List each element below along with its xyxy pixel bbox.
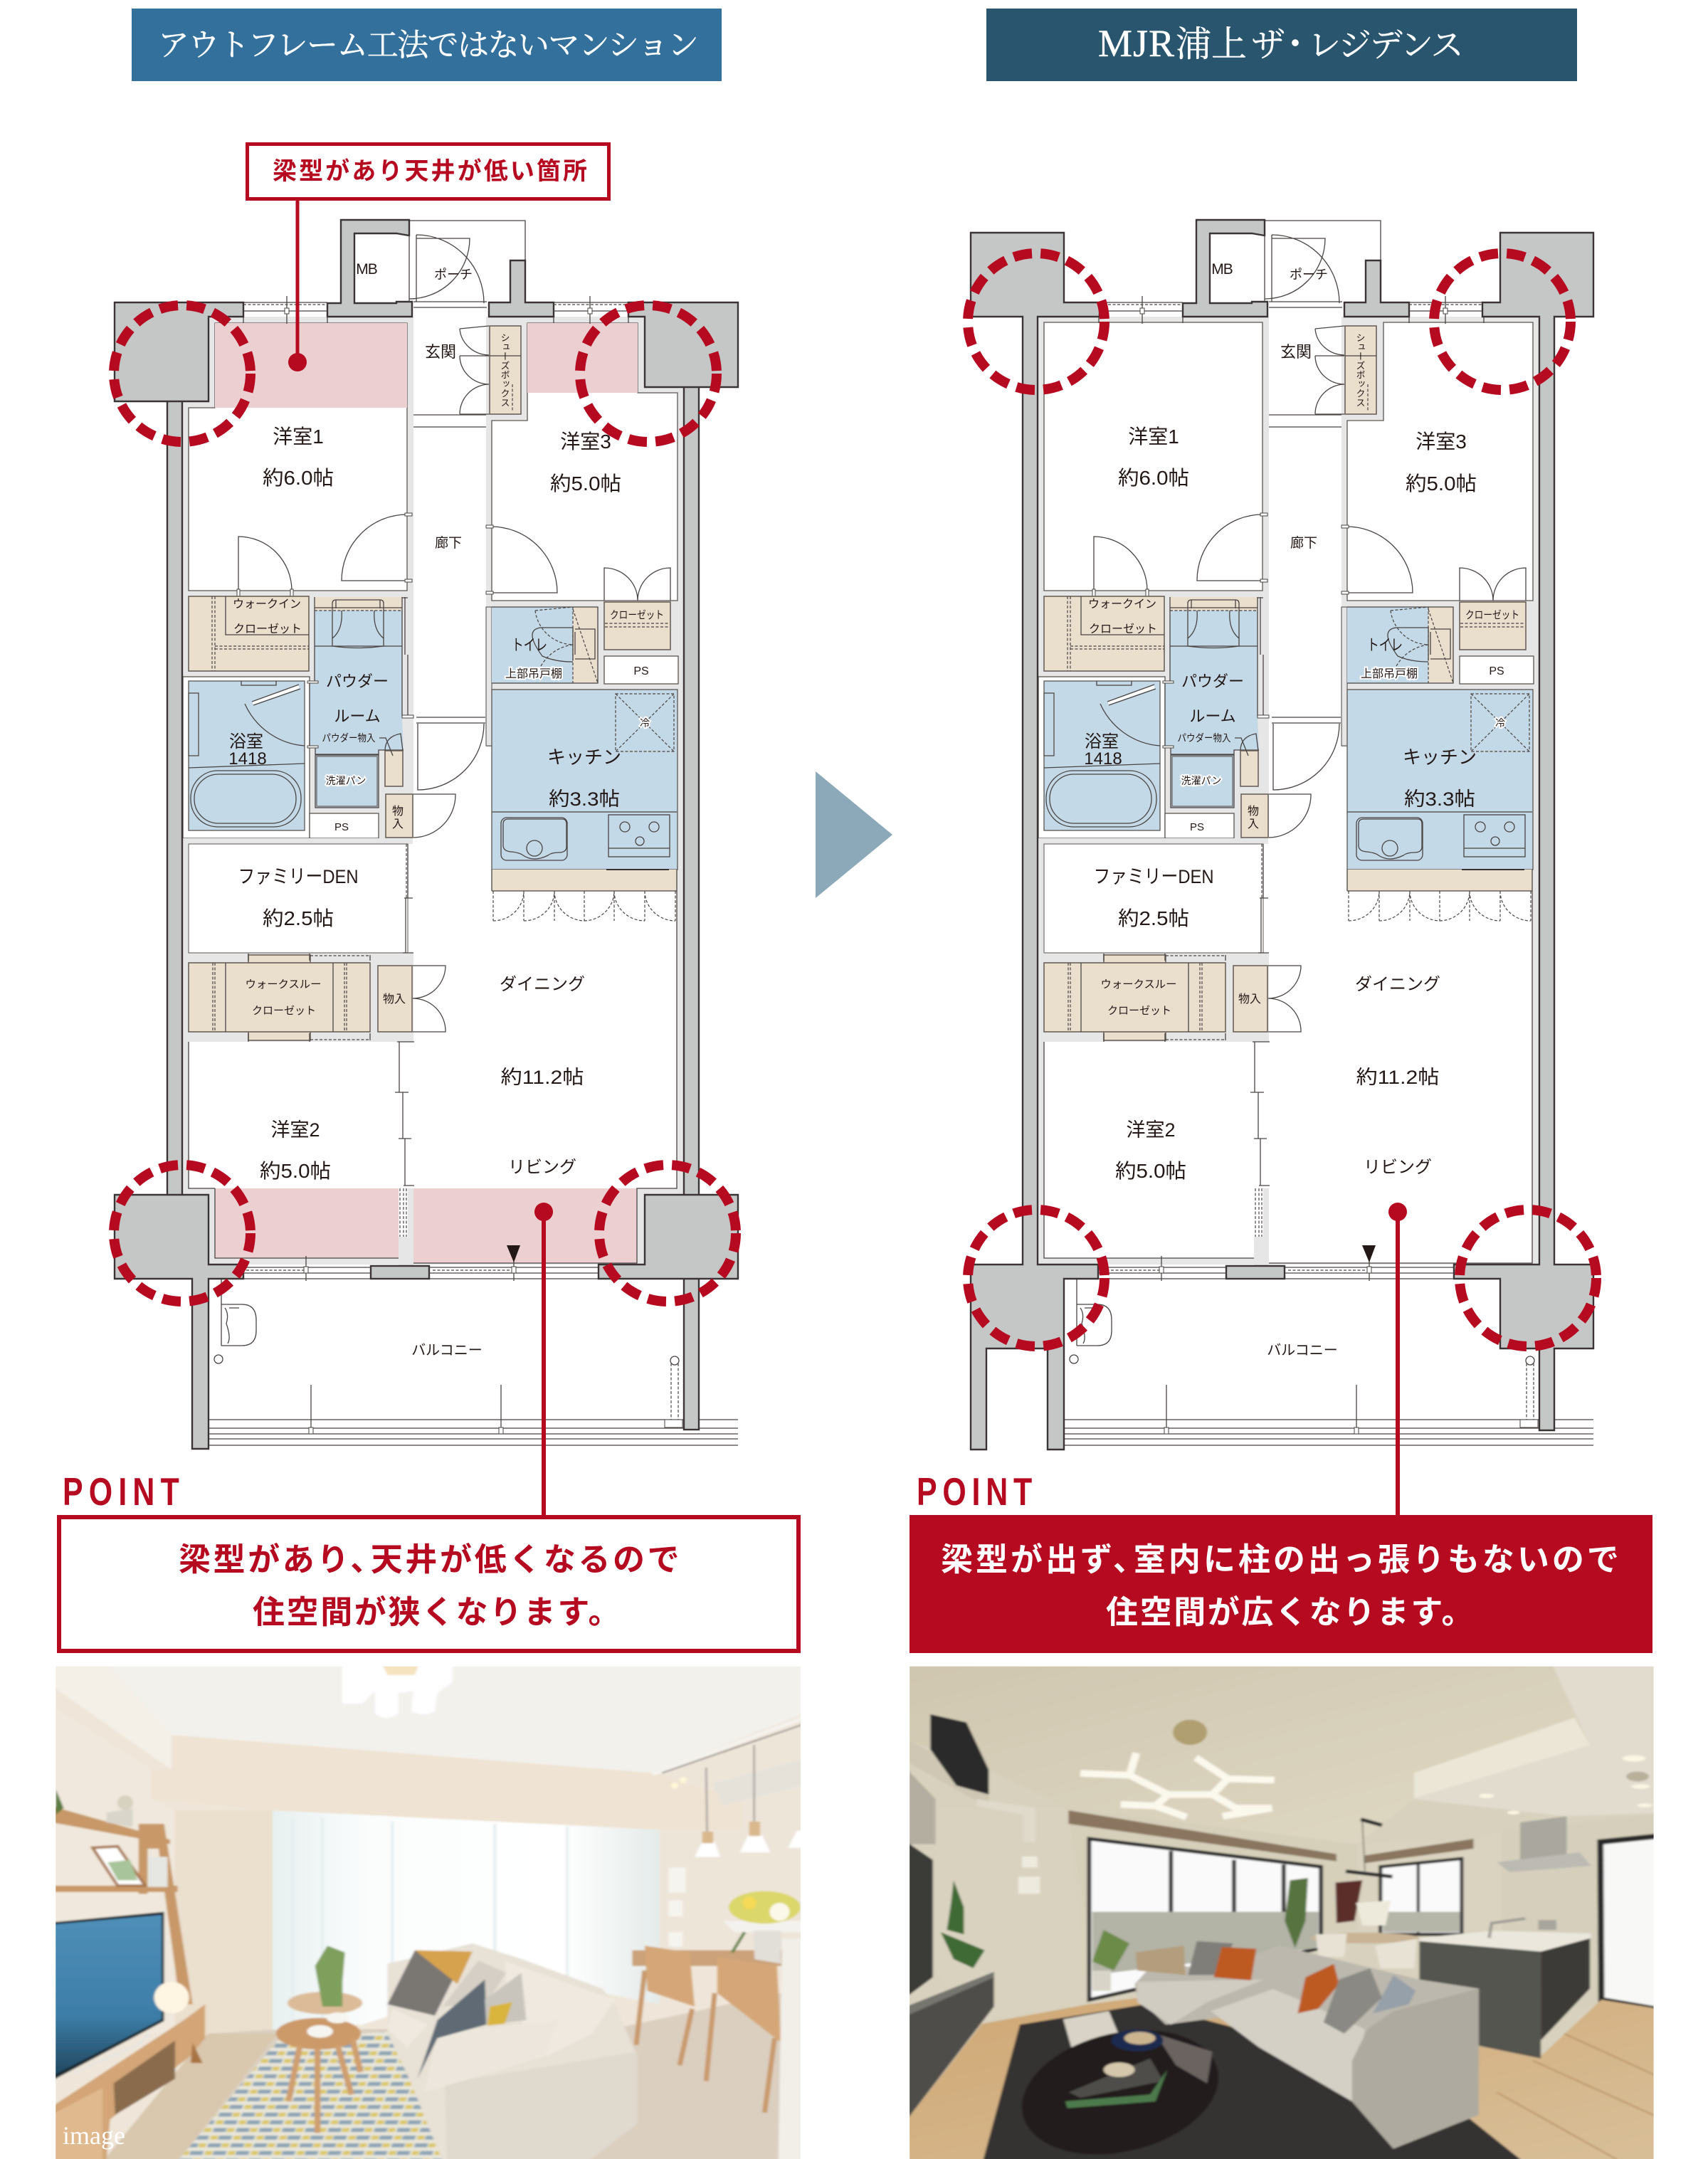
room labels: 物入 (1238, 993, 1261, 1005)
window blinds (1068, 1810, 1337, 1862)
room labels: ポーチ (434, 268, 473, 282)
dashed ring: bottom-right column (599, 1165, 736, 1302)
room labels: 洋室1 (1128, 426, 1179, 448)
room labels: リビング (1364, 1158, 1432, 1177)
room labels: パウダー (326, 672, 389, 690)
room labels: パウダー (1181, 672, 1244, 690)
callout box right: 住空間が広くなります。 (1106, 1594, 1475, 1630)
callout box left (59, 1517, 798, 1651)
room labels: 物入 (383, 993, 406, 1005)
dashed ring: top-right column (580, 305, 717, 442)
header: アウトフレーム工法ではないマンション (132, 9, 722, 81)
ceiling (110, 1667, 801, 1773)
callout box right (910, 1515, 1652, 1653)
room labels: キッチン (547, 746, 621, 768)
room labels: MB (1211, 261, 1233, 278)
plant (315, 1946, 345, 2007)
AC and duct (930, 1714, 989, 1795)
room labels: クローゼット (1107, 1005, 1171, 1017)
range hood (1520, 1816, 1566, 1860)
room labels: クローゼット (233, 623, 302, 635)
flowers (729, 1891, 801, 1923)
room labels: 冷 (1495, 717, 1505, 729)
room labels: ポーチ (1290, 268, 1328, 282)
floor (897, 1997, 1672, 2159)
room labels: PS (1190, 821, 1204, 833)
room labels: 約11.2帖 (1356, 1067, 1439, 1088)
room labels: 入 (392, 818, 404, 830)
glass door right (1601, 1835, 1667, 2011)
room labels: 約3.3帖 (1404, 788, 1475, 810)
room labels: パウダー物入 (1177, 732, 1231, 744)
leader line to top pink zone (288, 200, 307, 371)
room labels: 上部吊戸棚 (505, 667, 562, 680)
room labels: 約5.0帖 (260, 1160, 331, 1182)
plants (1285, 1878, 1308, 1948)
dashed ring: bottom-left column (114, 1165, 251, 1302)
room labels: 洗濯パン (1181, 775, 1221, 786)
room labels: 玄関 (425, 343, 456, 361)
pendants and track (652, 1717, 801, 1776)
room labels: 浴室 (1085, 732, 1119, 751)
fixtures, doors and walls (1038, 220, 1593, 1445)
room labels: 約2.5帖 (1118, 907, 1189, 929)
header: MJR浦上ザ・レジデンス: 浦上 (1176, 24, 1247, 64)
header: MJR浦上ザ・レジデンス: ・ (1277, 24, 1313, 64)
structural walls and outframe columns pushed outside (971, 233, 1593, 1450)
header: MJR浦上ザ・レジデンス: ザ (1251, 26, 1285, 64)
coffee table (1063, 2011, 1120, 2052)
room labels: シューズボックス (1355, 333, 1365, 407)
outlets (669, 1868, 685, 1892)
globe lamp (154, 1982, 189, 2013)
room labels: バルコニー (1267, 1343, 1338, 1358)
photo: left living room (43, 1654, 822, 2159)
room labels: ルーム (334, 707, 381, 725)
room labels: 約6.0帖 (1118, 467, 1189, 489)
callout: 梁型があり天井が低い箇所 (248, 144, 609, 199)
room labels: 洋室2 (1126, 1119, 1176, 1141)
room labels: 1418 (228, 749, 267, 769)
POINT heading left: POINT (63, 1470, 179, 1514)
interior slab (182, 317, 684, 1265)
ceiling (897, 1654, 1590, 1844)
sofa (387, 1943, 637, 2159)
panel: right floor plan (971, 220, 1593, 1450)
callout box left: 住空間が狭くなります。 (253, 1594, 622, 1630)
pendant (1346, 1820, 1392, 1876)
room labels: PS (633, 665, 649, 677)
main beam (152, 1735, 742, 1830)
rug (979, 2005, 1538, 2159)
dashed ring: right plan top-right column (1434, 253, 1571, 390)
header: アウトフレーム工法ではないマンション: アウトフレーム工法ではないマンション (158, 28, 699, 63)
room labels: クローゼット (252, 1005, 316, 1017)
room labels: シューズボックス (500, 333, 510, 407)
walls (936, 1808, 1088, 2020)
room labels: 浴室 (229, 732, 263, 751)
TV (56, 1911, 166, 2080)
chairs and table (1311, 1933, 1419, 1943)
dashed ring: top-left column (114, 305, 251, 442)
room labels: 約2.5帖 (263, 907, 334, 929)
POINT heading right: POINT (917, 1470, 1032, 1514)
header: MJR浦上ザ・レジデンス: MJR (1098, 22, 1175, 65)
room labels: ファミリーDEN (1093, 866, 1214, 887)
header: MJR浦上ザ・レジデンス (986, 9, 1577, 81)
cushions (1188, 1941, 1233, 1975)
room labels: 洋室1 (273, 426, 324, 448)
coffee tables (288, 1992, 362, 2015)
kitchen island (1419, 1941, 1541, 2059)
cushions (387, 1951, 463, 2015)
room labels: 廊下 (1290, 535, 1317, 551)
room labels: キッチン (1403, 746, 1477, 768)
room labels: ウォークイン (1088, 598, 1156, 611)
room labels: 約5.0帖 (1406, 473, 1477, 495)
room labels: MB (356, 261, 377, 278)
room labels: 洗濯パン (326, 775, 366, 786)
room labels: 入 (1248, 818, 1259, 830)
room labels: トイレ (1367, 636, 1403, 654)
floor (190, 1992, 781, 2159)
room labels: クローゼット (610, 609, 664, 621)
room labels: バルコニー (411, 1343, 483, 1358)
ladder shelf and shelves (139, 1824, 193, 2005)
room labels: 物 (392, 805, 404, 818)
fixtures, doors and walls (183, 220, 738, 1445)
windows (1089, 1839, 1321, 2000)
dashed ring: right plan top-left column (968, 253, 1105, 390)
panel: left floor plan (115, 220, 738, 1449)
room labels: PS (1489, 665, 1504, 677)
room labels: ダイニング (1355, 975, 1440, 994)
label: image: image (63, 2121, 125, 2150)
room labels: ルーム (1189, 707, 1236, 725)
room labels: 洋室2 (270, 1119, 320, 1141)
room labels: ウォークスルー (245, 978, 322, 991)
room labels: クローゼット (1089, 623, 1157, 635)
TV wall and console (897, 1835, 933, 2005)
right wall (652, 1716, 822, 1948)
curtain (273, 1810, 660, 2030)
room labels: 物 (1248, 805, 1259, 818)
leader line to bottom pink zone (534, 1203, 553, 1517)
rug (167, 2032, 453, 2159)
room labels: 約5.0帖 (550, 473, 621, 495)
room shapes without beams (1044, 307, 1533, 1263)
room labels: 約11.2帖 (501, 1067, 584, 1088)
arrow between plans (816, 771, 892, 898)
structural walls and outframe columns pushed inward (115, 302, 738, 1449)
leader line right plan (1388, 1203, 1407, 1517)
chandelier (1173, 1720, 1207, 1745)
room labels: 1418 (1084, 749, 1122, 769)
room labels: 約3.3帖 (549, 788, 620, 810)
room labels: 玄関 (1280, 343, 1312, 361)
callout box left: 梁型があり、天井が低くなるので (179, 1541, 682, 1578)
room labels: リビング (508, 1158, 576, 1177)
ceiling light (342, 1667, 453, 1718)
room labels: パウダー物入 (322, 732, 376, 744)
room labels: ウォークイン (233, 598, 301, 611)
dashed ring: right plan bottom-left column (968, 1210, 1105, 1346)
room labels: 上部吊戸棚 (1361, 667, 1418, 680)
downlights (1623, 1756, 1645, 1762)
room labels: 約5.0帖 (1115, 1160, 1186, 1182)
room labels: 洋室3 (1416, 431, 1467, 453)
room labels: 洋室3 (560, 431, 611, 453)
room labels: PS (334, 821, 349, 833)
side beam (56, 1667, 171, 1768)
room labels: 冷 (640, 717, 650, 729)
photo: right living room (897, 1654, 1672, 2159)
dashed ring: right plan bottom-right column (1460, 1210, 1596, 1346)
room labels: ウォークスルー (1100, 978, 1177, 991)
sofa (1134, 1946, 1479, 2149)
dining (632, 1951, 782, 1966)
interior slab (1038, 317, 1539, 1265)
callout box right: 梁型が出ず、室内に柱の出っ張りもないので (941, 1541, 1622, 1578)
TV stand (43, 2005, 205, 2159)
callout: 梁型があり天井が低い箇所: 梁型があり天井が低い箇所 (273, 157, 587, 185)
header: MJR浦上ザ・レジデンス: レジデンス (1308, 27, 1462, 63)
room labels: ダイニング (500, 975, 585, 994)
room labels: トイレ (512, 636, 547, 654)
room labels (1084, 261, 1519, 1358)
room labels (228, 261, 664, 1358)
room shapes with pink low-ceiling zones (189, 307, 678, 1263)
room labels: 廊下 (435, 535, 462, 551)
room labels: ファミリーDEN (238, 866, 359, 887)
room labels: クローゼット (1465, 609, 1519, 621)
room labels: 約6.0帖 (263, 467, 334, 489)
